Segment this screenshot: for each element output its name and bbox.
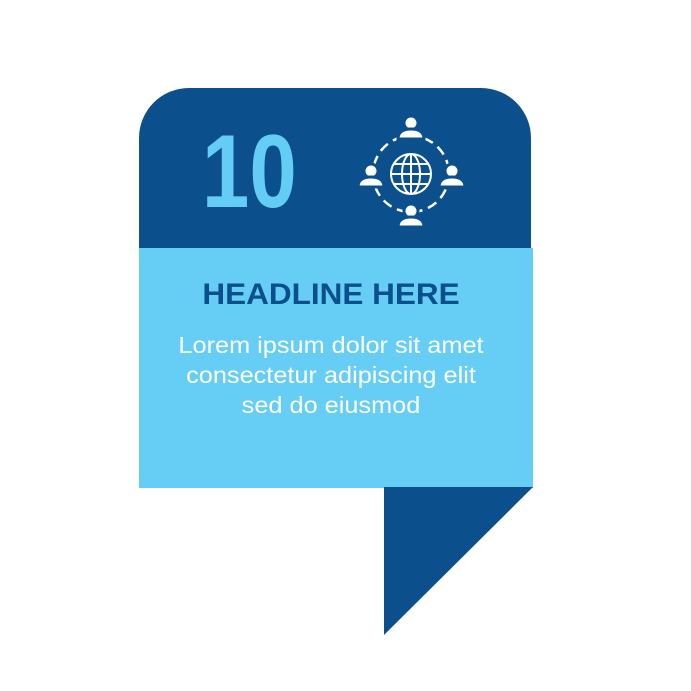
headline: HEADLINE HERE	[202, 278, 460, 311]
body text: consectetur adipiscing elit	[186, 362, 476, 388]
icon: global network	[360, 118, 464, 226]
number 10: 10	[202, 114, 297, 230]
pointer triangle	[384, 487, 533, 635]
body text: Lorem ipsum dolor sit amet	[178, 332, 484, 358]
body text	[178, 332, 484, 418]
panel: light body block	[139, 248, 533, 488]
body text: sed do eiusmod	[242, 392, 420, 418]
panel: top header block	[139, 88, 531, 249]
